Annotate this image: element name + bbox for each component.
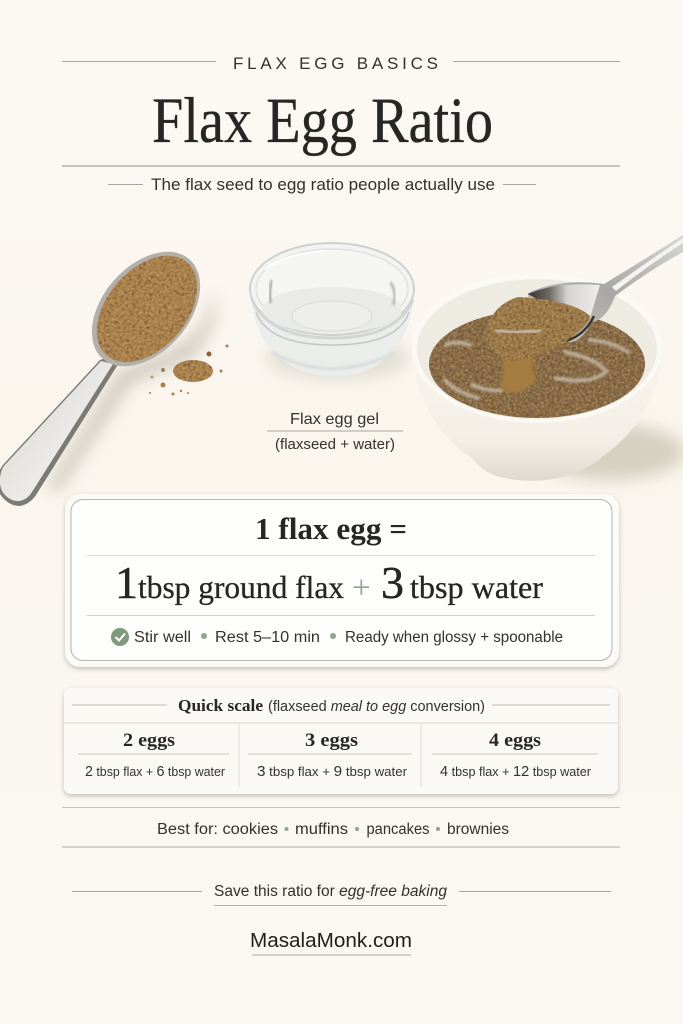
column: 4 eggs: 4 tbsp flax + 12 tbsp water (440, 763, 592, 780)
photo: glass bowl of water (250, 243, 414, 380)
call to action: Save this ratio for egg-free baking (214, 883, 447, 900)
photo: spoon of ground flaxseed (0, 231, 222, 506)
steps line (134, 629, 563, 646)
steps line: Ready when glossy + spoonable (345, 629, 563, 646)
steps line: Stir well (134, 629, 191, 646)
icon: check mark (111, 628, 129, 646)
best for line: Best for: cookies (157, 821, 278, 838)
column: 3 eggs: 3 tbsp flax + 9 tbsp water (257, 763, 408, 780)
subtitle: The flax seed to egg ratio people actually use (151, 176, 495, 194)
header eyebrow: Flax Egg Basics: FLAX EGG BASICS (233, 54, 438, 73)
panel: ratio card (65, 494, 619, 667)
brand: MasalaMonk.com: MasalaMonk.com (250, 930, 412, 952)
formula: tablespoons of flax and water: 1 (115, 557, 138, 608)
caption: flax egg gel (267, 411, 403, 453)
column: 4 eggs: 4 eggs (489, 730, 541, 751)
divider under title (62, 165, 620, 167)
column: 2 eggs: 2 eggs (123, 730, 175, 751)
best for line: pancakes (366, 821, 430, 838)
formula: tablespoons of flax and water: + (352, 570, 371, 606)
column: 2 eggs: 2 tbsp flax + 6 tbsp water (85, 763, 226, 780)
heading: quick scale: Quick scale (178, 696, 263, 715)
panel: quick scale table (64, 688, 618, 794)
formula: tablespoons of flax and water: tbsp ground flax (138, 569, 344, 605)
best for line (62, 808, 620, 847)
column: 3 eggs: 3 eggs (305, 730, 358, 751)
column: 3 eggs (248, 730, 412, 780)
caption: flax egg gel: (flaxseed + water) (275, 437, 395, 453)
best for line: muffins (295, 821, 348, 838)
heading: quick scale (72, 696, 610, 715)
heading: quick scale: (flaxseed meal to egg conversion) (268, 698, 485, 715)
heading: 1 flax egg =: 1 flax egg = (255, 511, 407, 546)
column: 2 eggs (78, 730, 229, 780)
formula: tablespoons of flax and water: tbsp water (410, 569, 543, 605)
steps line: Rest 5–10 min (215, 629, 320, 646)
formula: tablespoons of flax and water: 3 (381, 557, 404, 608)
photo: spilled flax pile (149, 344, 228, 396)
best for line: brownies (447, 821, 509, 838)
photo: white bowl of flax gel with spoon (412, 235, 683, 481)
caption: flax egg gel: Flax egg gel (290, 411, 379, 428)
title: Flax Egg Ratio (152, 85, 493, 157)
column: 4 eggs (432, 730, 598, 780)
